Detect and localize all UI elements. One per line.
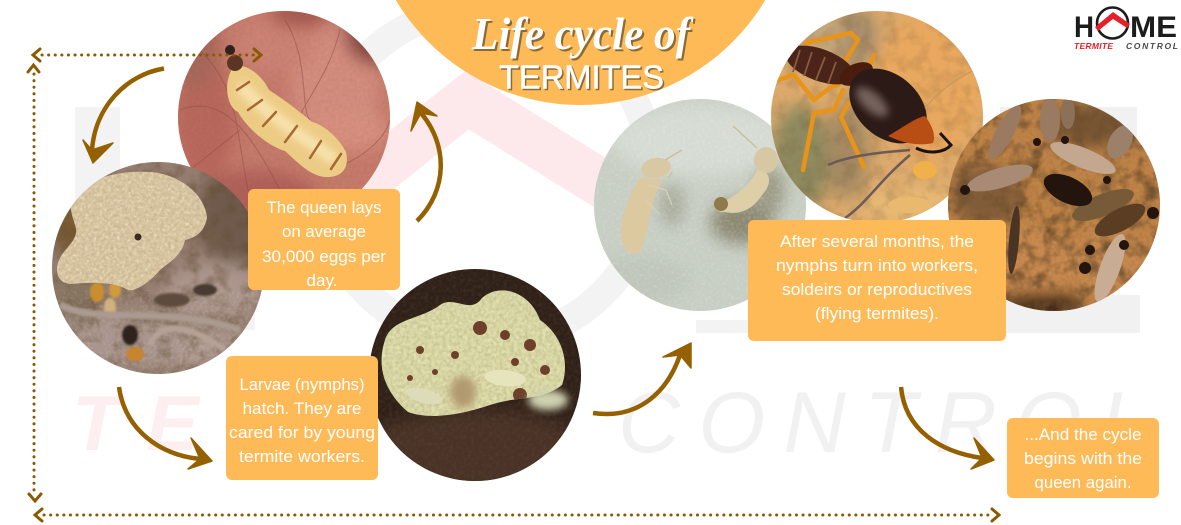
watermark: faded company logo: TER — [72, 379, 282, 467]
arrow: up to queen — [411, 102, 441, 221]
text box: larvae hatch: termite workers. — [239, 447, 365, 466]
text box: cycle begins again — [1007, 418, 1159, 498]
photo: nymphs among eggs in soil — [365, 269, 585, 490]
dotted double arrow: bottom — [35, 509, 999, 521]
logo: Home Termite Control: CONTROL — [1126, 41, 1178, 51]
text box: the queen lays: The queen lays — [266, 198, 382, 217]
text box: nymphs turn into workers: (flying termites). — [815, 304, 939, 323]
text box: cycle begins again: begins with the — [1024, 449, 1142, 468]
text box: the queen lays — [248, 189, 400, 290]
text box: nymphs turn into workers: soldeirs or reproductives — [782, 280, 972, 299]
dotted double arrow: left — [28, 65, 41, 501]
logo: Home Termite Control — [1074, 8, 1178, 51]
watermark: faded company logo: CONTROL — [618, 375, 1148, 471]
queen body — [225, 45, 347, 177]
text box: larvae hatch: cared for by young — [229, 423, 375, 442]
arrow: eggs to larvae — [119, 387, 212, 469]
logo: Home Termite Control: ME — [1130, 11, 1177, 44]
egg mass — [57, 172, 207, 290]
text box: the queen lays: 30,000 eggs per — [262, 247, 386, 266]
text box: cycle begins again: ...And the cycle — [1024, 425, 1142, 444]
text box: the queen lays: day. — [306, 271, 338, 290]
soldier head — [849, 68, 972, 154]
text box: larvae hatch: hatch. They are — [242, 399, 362, 418]
text box: nymphs turn into workers: nymphs turn into workers, — [776, 256, 978, 275]
soldier abdomen — [787, 46, 850, 84]
title: Life cycle of: Life cycle of — [473, 10, 696, 61]
logo: Home Termite Control: TERMITE — [1074, 41, 1113, 51]
soldier legs — [778, 33, 874, 170]
text box: larvae hatch — [226, 356, 378, 480]
title semicircle banner — [366, 0, 796, 105]
text box: cycle begins again: queen again. — [1034, 473, 1132, 492]
photo: two pale nymphs — [590, 99, 806, 311]
photo: termite eggs on nest — [50, 162, 267, 380]
arrow: larvae to nymphs — [593, 343, 691, 414]
arrow: nymphs to cycle restart — [901, 387, 994, 469]
nymph left — [621, 150, 682, 254]
text box: larvae hatch: Larvae (nymphs) — [240, 375, 364, 394]
title: TERMITES: TERMITES — [500, 60, 666, 97]
dotted double arrow: top — [33, 49, 261, 61]
nymph right — [714, 126, 778, 213]
title: Life cycle of: Life cycle of — [471, 8, 694, 59]
title: TERMITES: TERMITES — [499, 58, 664, 96]
logo: Home Termite Control: H — [1074, 11, 1094, 44]
photo: soldier termite — [770, 8, 985, 223]
text box: nymphs turn into workers: After several months, the — [780, 232, 974, 251]
text box: nymphs turn into workers — [748, 220, 1006, 341]
text box: the queen lays: on average — [282, 222, 366, 241]
wings — [965, 97, 1150, 305]
photo: winged reproductive termites on bark — [948, 97, 1160, 318]
arrow: queen to eggs — [83, 68, 164, 163]
photo: queen termite on a palm — [178, 11, 390, 212]
